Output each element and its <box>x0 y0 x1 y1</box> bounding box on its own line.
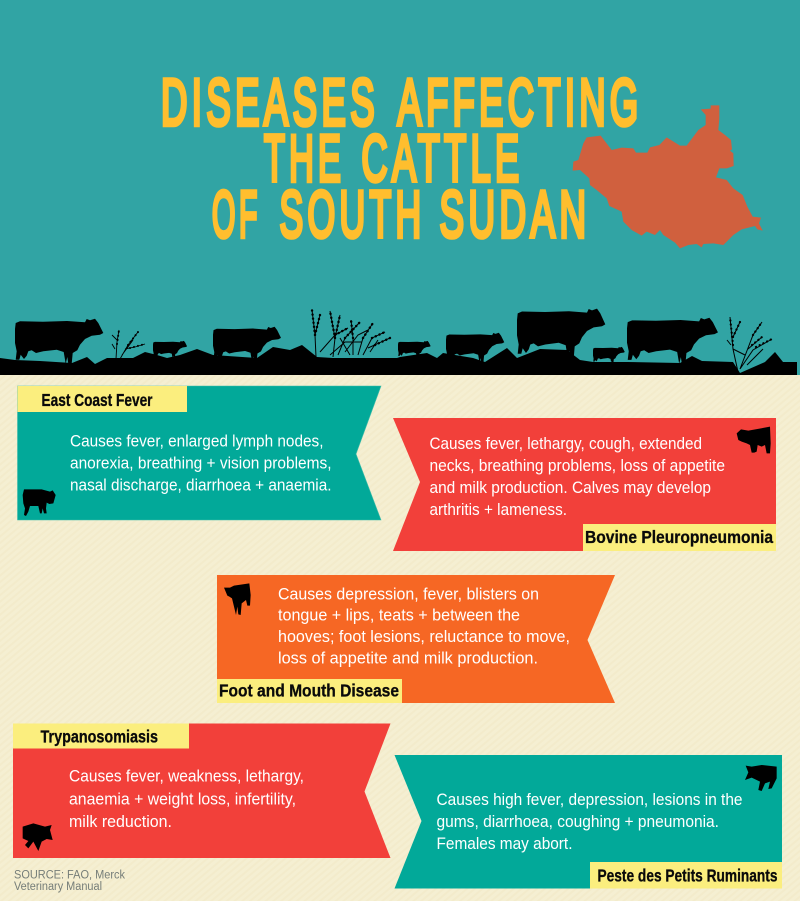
label tag <box>18 386 187 412</box>
title: SUDAN <box>440 177 590 251</box>
cow 3 <box>446 333 504 363</box>
description: Causes fever, enlarged lymph nodes, <box>70 432 324 450</box>
description: loss of appetite and milk production. <box>278 648 538 668</box>
disease name: Trypanosomiasis <box>40 726 158 746</box>
bush 1 <box>112 330 145 359</box>
source note: Veterinary Manual <box>14 881 102 893</box>
title: SOUTH <box>280 177 426 251</box>
cow 4 <box>517 309 605 358</box>
description: nasal discharge, diarrhoea + anaemia. <box>70 476 332 494</box>
calf 3 <box>593 347 625 363</box>
icon: cow <box>737 427 771 453</box>
description <box>278 584 570 668</box>
icon: cow <box>23 489 56 516</box>
source note: SOURCE: FAO, Merck <box>14 870 125 882</box>
ribbon <box>13 724 390 858</box>
description: Causes fever, lethargy, cough, extended <box>430 434 702 453</box>
label tag <box>217 679 402 703</box>
calf 2 <box>398 341 431 358</box>
panel: Bovine Pleuropneumonia <box>393 418 776 551</box>
map: South Sudan <box>573 105 763 248</box>
description <box>436 790 742 853</box>
landscape silhouette: herd, bushes and ground <box>0 309 797 375</box>
bush 3 <box>727 317 772 372</box>
cow 1 <box>15 319 103 364</box>
description: tongue + lips, teats + between the <box>278 606 520 624</box>
header background <box>0 0 800 375</box>
label tag <box>583 524 776 551</box>
title: OF <box>212 177 261 251</box>
icon: cow <box>745 765 777 791</box>
panel: Trypanosomiasis <box>13 724 390 858</box>
description: gums, diarrhoea, coughing + pneumonia. <box>436 812 719 831</box>
description: Causes depression, fever, blisters on <box>278 584 539 604</box>
ground <box>0 345 797 375</box>
cow 2 <box>213 327 281 362</box>
calf 1 <box>153 341 187 358</box>
description: anaemia + weight loss, infertility, <box>69 790 296 808</box>
description: anorexia, breathing + vision problems, <box>70 454 332 472</box>
title <box>161 65 642 251</box>
description: Causes high fever, depression, lesions in the <box>436 790 742 809</box>
disease name: Foot and Mouth Disease <box>219 680 399 700</box>
source note <box>14 870 125 893</box>
title: CATTLE <box>362 121 524 195</box>
label tag <box>590 862 782 888</box>
description <box>430 434 725 519</box>
icon: cow <box>224 583 251 615</box>
ribbon <box>393 418 776 551</box>
description: milk reduction. <box>69 812 172 831</box>
ribbon <box>217 575 615 703</box>
disease name: Bovine Pleuropneumonia <box>585 527 773 547</box>
cow 5 <box>627 318 718 364</box>
panel: East Coast Fever <box>18 386 381 520</box>
description <box>69 766 304 831</box>
title: THE <box>264 121 345 195</box>
bush 2 <box>312 310 390 357</box>
description: and milk production. Calves may develop <box>430 478 711 497</box>
description: arthritis + lameness. <box>430 500 567 519</box>
title: DISEASES <box>161 65 379 139</box>
panel: Foot and Mouth Disease <box>217 575 615 703</box>
description <box>70 432 332 494</box>
panel: Peste des Petits Ruminants <box>394 755 782 888</box>
label tag <box>13 724 189 748</box>
ribbon <box>18 386 381 520</box>
description: Females may abort. <box>436 834 572 853</box>
description: necks, breathing problems, loss of appetite <box>430 456 725 475</box>
description: hooves; foot lesions, reluctance to move, <box>278 627 570 646</box>
ribbon <box>394 755 782 888</box>
description: Causes fever, weakness, lethargy, <box>69 766 304 786</box>
disease name: East Coast Fever <box>42 390 153 410</box>
icon: cow <box>23 823 53 851</box>
